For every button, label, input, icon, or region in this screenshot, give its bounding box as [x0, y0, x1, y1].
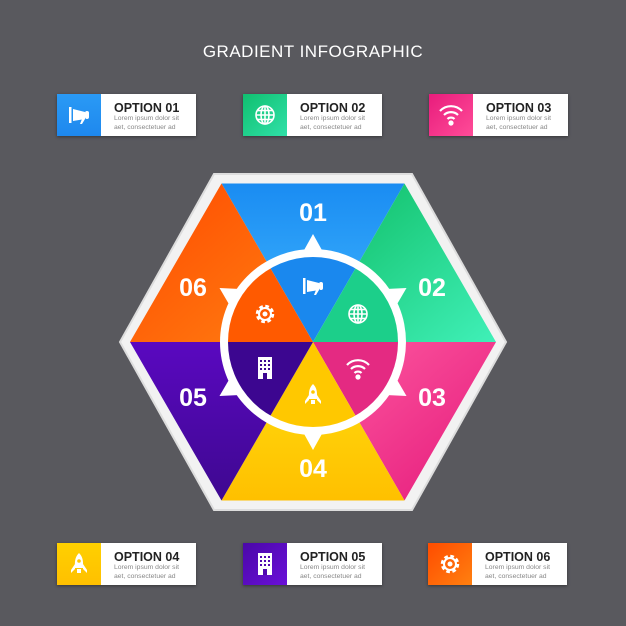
segment 05	[130, 342, 313, 500]
option 04 box: aet, consectetuer ad	[114, 572, 176, 580]
option 01 box: Lorem ipsum dolor sit	[114, 115, 179, 122]
segment 06	[130, 184, 313, 342]
option 03 box: aet, consectetuer ad	[486, 124, 548, 130]
numbers: 04	[299, 455, 327, 483]
option 05 box: Lorem ipsum dolor sit	[300, 564, 365, 571]
option 04 box	[57, 543, 196, 585]
ring with notches	[220, 234, 406, 450]
option 06 box: Lorem ipsum dolor sit	[485, 564, 550, 571]
numbers: 06	[179, 274, 207, 302]
numbers: 03	[418, 384, 446, 412]
numbers	[179, 199, 446, 483]
option 03 box: OPTION 03	[486, 101, 551, 115]
option 04 box: OPTION 04	[114, 550, 179, 564]
option 06 box: OPTION 06	[485, 550, 550, 564]
option 03 box	[429, 94, 568, 136]
numbers: 05	[179, 384, 207, 412]
option 02 box: aet, consectetuer ad	[300, 124, 362, 130]
option 03 box: Lorem ipsum dolor sit	[486, 115, 551, 122]
option 05 box: OPTION 05	[300, 550, 365, 564]
numbers: 01	[299, 199, 327, 227]
option 01 box: aet, consectetuer ad	[114, 124, 176, 130]
option 02 box	[243, 94, 382, 136]
option 02 box: Lorem ipsum dolor sit	[300, 115, 365, 122]
option 01 box: OPTION 01	[114, 101, 179, 115]
option 02 box: OPTION 02	[300, 101, 365, 115]
title: GRADIENT INFOGRAPHIC	[203, 42, 423, 61]
hexagon diagram	[120, 174, 506, 510]
option 04 box: Lorem ipsum dolor sit	[114, 564, 179, 571]
segment 04	[222, 342, 404, 500]
numbers: 02	[418, 274, 446, 302]
icons	[258, 278, 369, 404]
segment 03	[313, 342, 496, 500]
option 01 box	[57, 94, 196, 136]
option 06 box	[428, 543, 567, 585]
segment 02	[313, 184, 496, 342]
inner circle	[228, 257, 398, 427]
option 05 box: aet, consectetuer ad	[300, 572, 362, 580]
segment 01	[222, 184, 404, 342]
option 06 box: aet, consectetuer ad	[485, 572, 547, 580]
option 05 box	[243, 543, 382, 585]
